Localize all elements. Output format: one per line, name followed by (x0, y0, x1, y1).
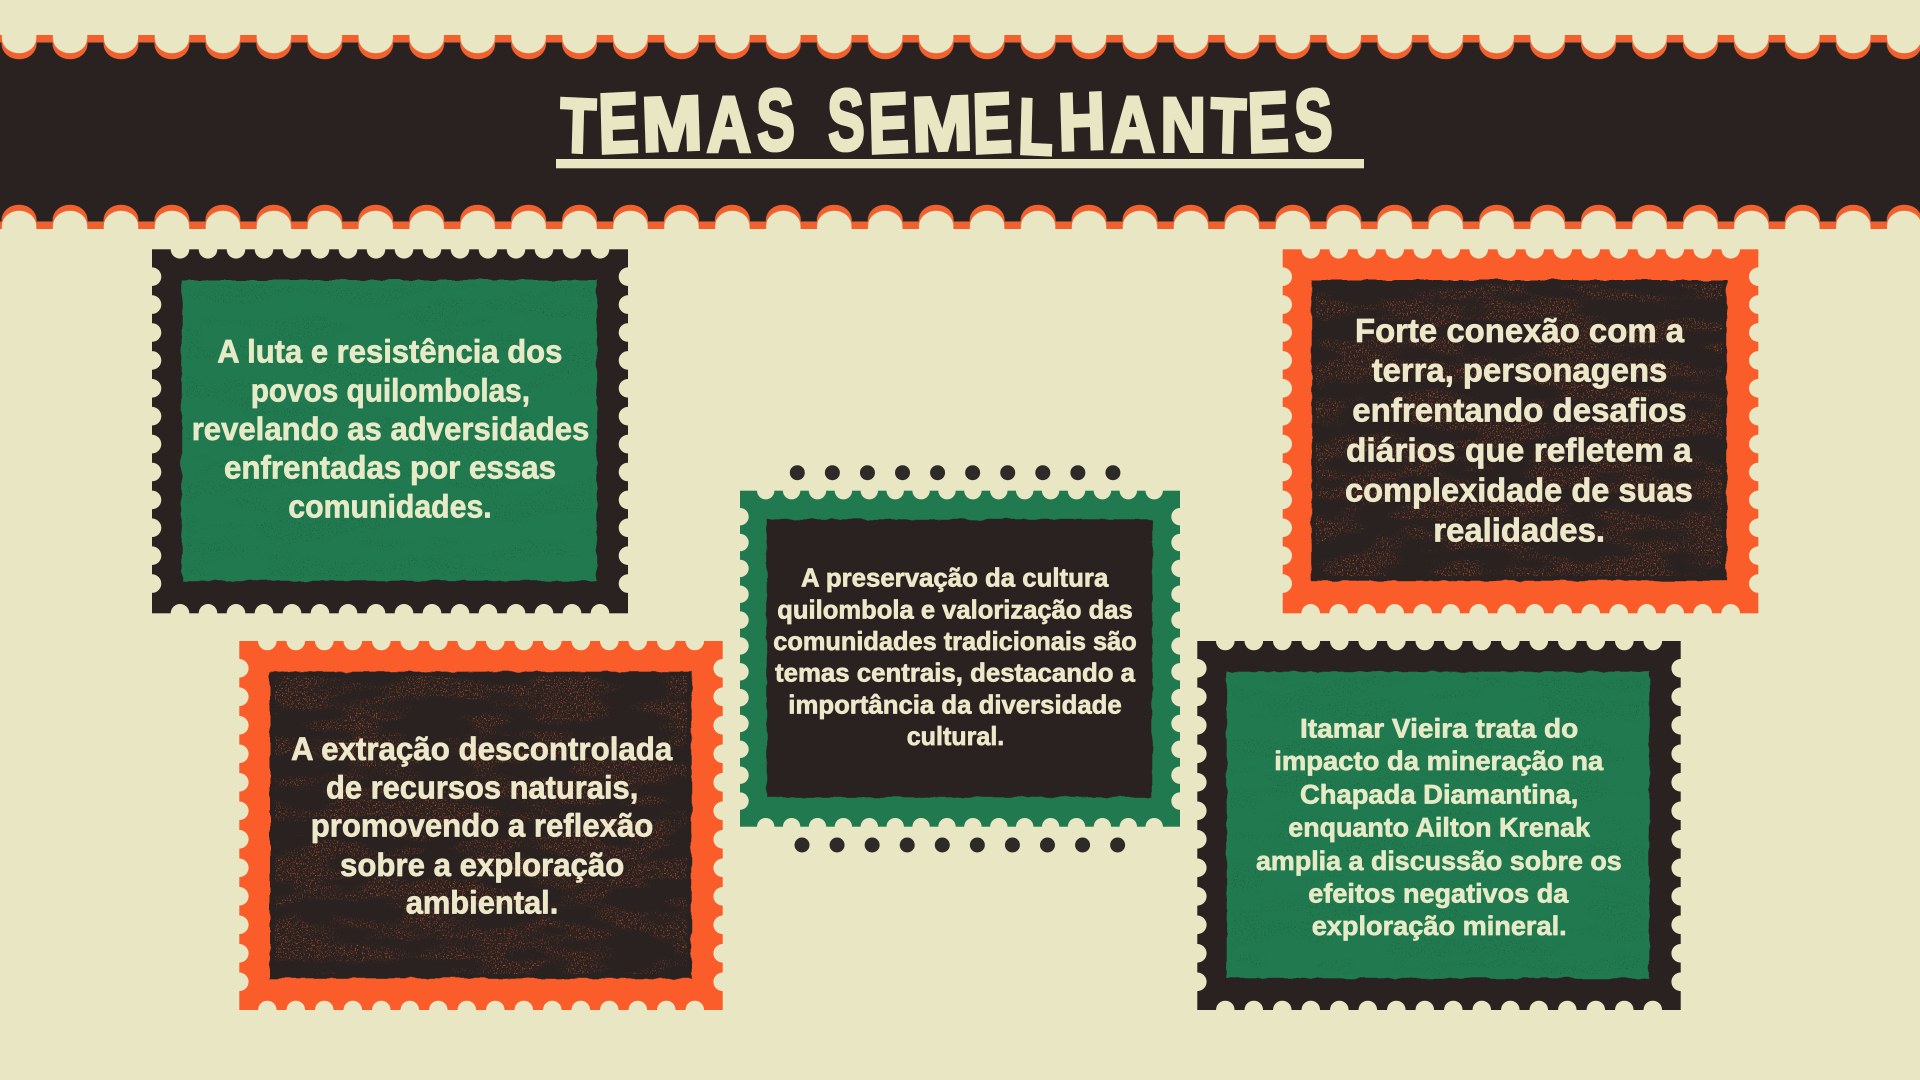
text block: ambiental. (406, 884, 558, 920)
text block: Itamar Vieira trata do (1300, 713, 1578, 743)
title: T (1210, 83, 1247, 169)
inner panel (1312, 280, 1727, 581)
text block: quilombola e valorização das (777, 594, 1133, 624)
text block: temas centrais, destacando a (775, 658, 1136, 688)
title underline (556, 159, 1364, 168)
text block: A preservação da cultura (801, 563, 1109, 593)
grain texture (1231, 676, 1645, 974)
text block: terra, personagens (1372, 352, 1667, 388)
perforations (1283, 249, 1758, 613)
title: E (597, 76, 640, 171)
title: N (1161, 83, 1206, 168)
text block: impacto da mineração na (1274, 746, 1604, 776)
grain texture (275, 676, 687, 974)
text block: efeitos negativos da (1308, 878, 1569, 908)
text block: enfrentadas por essas (224, 450, 556, 486)
text block (773, 563, 1137, 751)
text block: A luta e resistência dos (217, 334, 562, 370)
text block: enfrentando desafios (1352, 392, 1687, 428)
text block: complexidade de suas (1345, 472, 1693, 508)
panel: impacto da mineração (1197, 641, 1681, 1010)
perforations (239, 641, 723, 1010)
panel: luta e resistência (152, 249, 628, 613)
text block: diários que refletem a (1346, 432, 1692, 468)
text block: enquanto Ailton Krenak (1288, 813, 1591, 843)
title: M (910, 81, 973, 168)
title: E (971, 76, 1013, 171)
panel: preservação da cultura (740, 491, 1180, 827)
text block: exploração mineral. (1312, 911, 1567, 941)
text block: de recursos naturais, (326, 769, 638, 805)
text block (291, 731, 672, 920)
inner panel (767, 519, 1152, 797)
text block: importância da diversidade (788, 689, 1122, 719)
dots row above center panel (797, 465, 1114, 480)
text block: realidades. (1433, 512, 1605, 548)
title: E (867, 76, 910, 171)
perforations (740, 491, 1180, 827)
stamp frame (152, 249, 628, 613)
title: A (1111, 80, 1155, 168)
text block (1256, 713, 1622, 941)
title: S (754, 72, 796, 170)
stamp frame (1197, 641, 1681, 1010)
text block: revelando as adversidades (192, 411, 589, 447)
title: T (559, 83, 597, 169)
inner panel (1227, 672, 1649, 978)
text block: povos quilombolas, (251, 372, 530, 408)
inner panel (182, 280, 597, 581)
grain texture (186, 284, 592, 576)
text block: comunidades. (288, 488, 492, 524)
text block: comunidades tradicionais são (773, 626, 1137, 656)
perforations (152, 249, 628, 613)
text block: promovendo a reflexão (311, 808, 653, 844)
text block (1345, 312, 1693, 548)
stamp frame (239, 641, 723, 1010)
stamp frame (1283, 249, 1758, 613)
panel: extração de recursos (239, 641, 723, 1010)
text block: A extração descontrolada (291, 731, 672, 767)
inner panel (270, 672, 692, 978)
panel: conexão com a terra (1283, 249, 1758, 613)
title: L (1017, 82, 1055, 171)
header banner with scalloped edges (0, 30, 1920, 234)
title: A (707, 80, 751, 168)
text block: Forte conexão com a (1355, 312, 1685, 349)
text block: cultural. (907, 721, 1004, 751)
text block (192, 334, 589, 524)
perforations (1197, 641, 1681, 1010)
dots row below center panel (802, 838, 1118, 852)
title: E (1246, 75, 1290, 170)
title: S (825, 72, 866, 170)
title: H (1056, 76, 1107, 167)
title (559, 72, 1334, 171)
title: M (640, 81, 703, 168)
text block: Chapada Diamantina, (1300, 779, 1578, 809)
text block: amplia a discussão sobre os (1256, 846, 1622, 876)
title: S (1292, 72, 1334, 170)
stamp frame (740, 491, 1180, 827)
grain texture (1316, 284, 1722, 576)
text block: sobre a exploração (340, 847, 624, 883)
